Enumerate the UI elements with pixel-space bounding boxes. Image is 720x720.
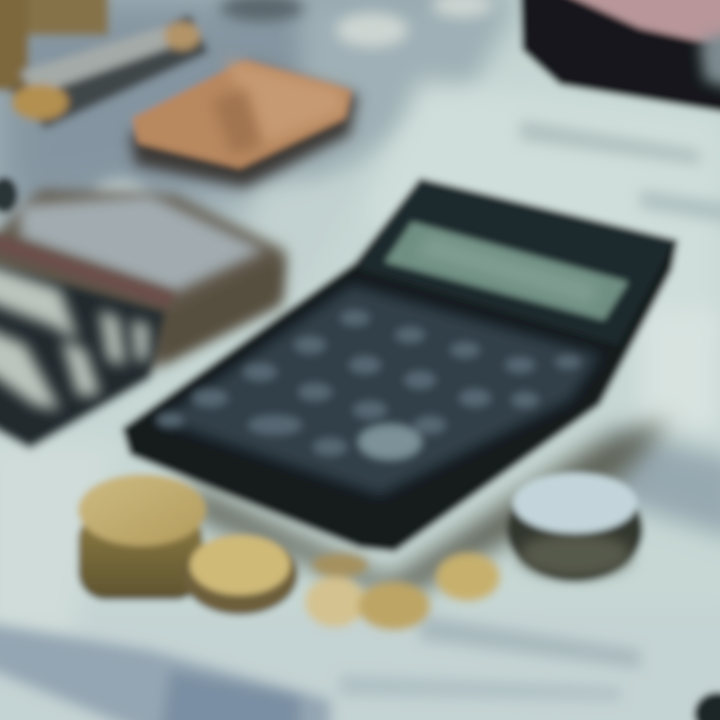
calculator body	[122, 178, 678, 552]
top-right dark box with pink lid	[520, 0, 720, 115]
calculator top panel	[358, 180, 675, 345]
gold coin	[182, 535, 298, 615]
gold coin stack	[78, 474, 206, 600]
calculator	[122, 178, 678, 552]
top-left objects: gold stack and grey bar with tan ends	[0, 0, 208, 128]
calculator shadow	[180, 420, 670, 600]
icon: small round coins in the distance	[94, 0, 492, 211]
small gold coins	[305, 553, 500, 630]
stack of banknotes on the left	[0, 177, 285, 448]
dark object in bottom-right corner	[694, 692, 720, 720]
calculator keys	[156, 310, 581, 460]
calculator keypad	[160, 285, 600, 495]
calculator display	[385, 222, 628, 320]
white coin stack	[507, 473, 643, 582]
brown rubber eraser block	[130, 60, 358, 188]
